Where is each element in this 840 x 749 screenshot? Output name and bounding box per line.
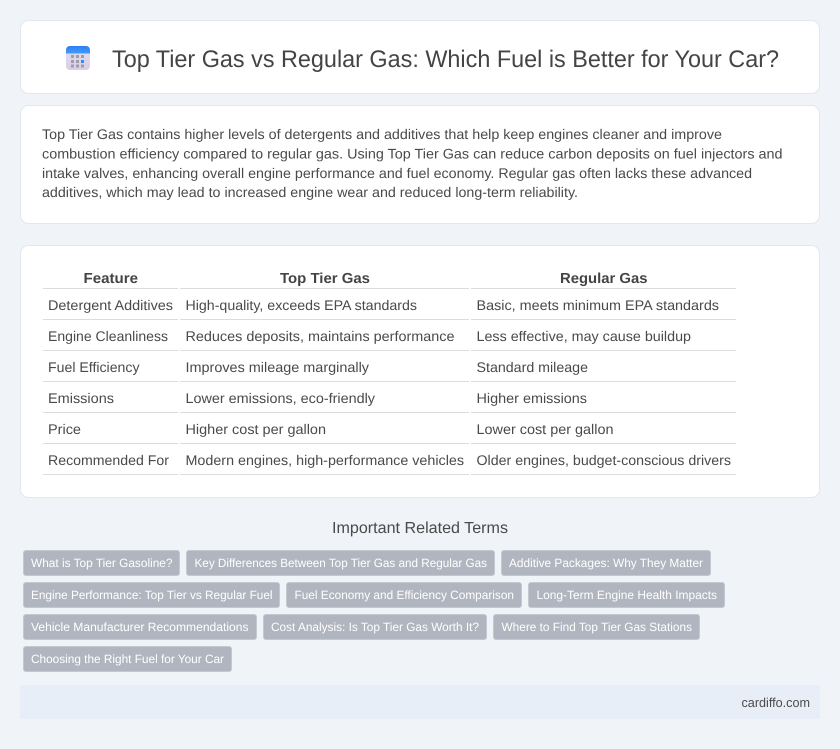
table header row [84,271,648,287]
row: detergent additives [48,297,719,313]
row: engine cleanliness: Less effective, may cause buildup [476,328,691,344]
row: recommended for: Modern engines, high-performance vehicles [186,452,464,468]
row: price: Higher cost per gallon [186,421,326,437]
row: emissions: Lower emissions, eco-friendly [186,390,375,406]
row: detergent additives: High-quality, exceeds EPA standards [186,297,417,313]
row: engine cleanliness: Engine Cleanliness [48,328,168,344]
row: engine cleanliness [48,328,691,344]
table header row: Feature [84,271,138,287]
row: emissions: Emissions [48,390,114,406]
tag: What is Top Tier Gasoline? [31,556,173,570]
title: Top Tier Gas vs Regular Gas: Which Fuel is Better for Your Car? [112,46,779,73]
tag: Additive Packages: Why They Matter [509,556,703,570]
tag [24,646,232,672]
row: detergent additives: Basic, meets minimum EPA standards [476,297,719,313]
row: fuel efficiency: Fuel Efficiency [48,359,140,375]
tag: Key Differences Between Top Tier Gas and Regular Gas [194,556,487,570]
row: emissions: Higher emissions [476,390,587,406]
tag [286,582,522,608]
tag [186,550,494,576]
row: recommended for: Recommended For [48,452,169,468]
tag [24,582,280,608]
row: engine cleanliness: Reduces deposits, maintains performance [186,328,455,344]
row: price: Price [48,421,81,437]
tag [264,614,486,640]
tag [24,550,180,576]
panel: header [20,20,820,94]
text block: description paragraph [42,126,783,200]
tag: Long-Term Engine Health Impacts [536,588,717,602]
text block: description paragraph: Top Tier Gas contains higher levels of detergents and additives that help keep engines cleaner and improve [42,126,722,142]
text block: description paragraph: combustion efficiency compared to regular gas. Using Top Tier Gas can reduce carbon deposits on fuel injectors and [42,146,783,162]
table header row: Regular Gas [560,271,648,287]
panel: comparison table [20,246,820,498]
tag: Engine Performance: Top Tier vs Regular Fuel [31,588,272,602]
row: emissions [48,390,587,406]
tag: Cost Analysis: Is Top Tier Gas Worth It? [271,620,479,634]
row: fuel efficiency: Improves mileage marginally [186,359,369,375]
icon: calendar [66,46,90,70]
tag [494,614,700,640]
row: fuel efficiency [48,359,588,375]
footer bar [20,685,820,719]
tag: Choosing the Right Fuel for Your Car [31,652,224,666]
tag [502,550,710,576]
text block: description paragraph: additives, which may lead to increased engine wear and reduced long-term reliability. [42,184,578,200]
row: detergent additives: Detergent Additives [48,297,173,313]
text block: description paragraph: intake valves, enhancing overall engine performance and fuel economy. Regular gas often lacks these advanced [42,165,752,181]
row: price: Lower cost per gallon [476,421,614,437]
row: recommended for: Older engines, budget-conscious drivers [476,452,731,468]
panel: related term tags [24,550,724,672]
row: price [48,421,614,437]
tag [528,582,724,608]
panel: description [20,106,820,224]
tag [24,614,256,640]
tag: Fuel Economy and Efficiency Comparison [294,588,514,602]
tag: Vehicle Manufacturer Recommendations [31,620,248,634]
footer credit: cardiffo.com [742,695,810,710]
row: recommended for [48,452,731,468]
row: fuel efficiency: Standard mileage [476,359,588,375]
table header row: Top Tier Gas [280,271,370,287]
heading: important related terms: Important Related Terms [332,520,508,537]
tag: Where to Find Top Tier Gas Stations [502,620,692,634]
